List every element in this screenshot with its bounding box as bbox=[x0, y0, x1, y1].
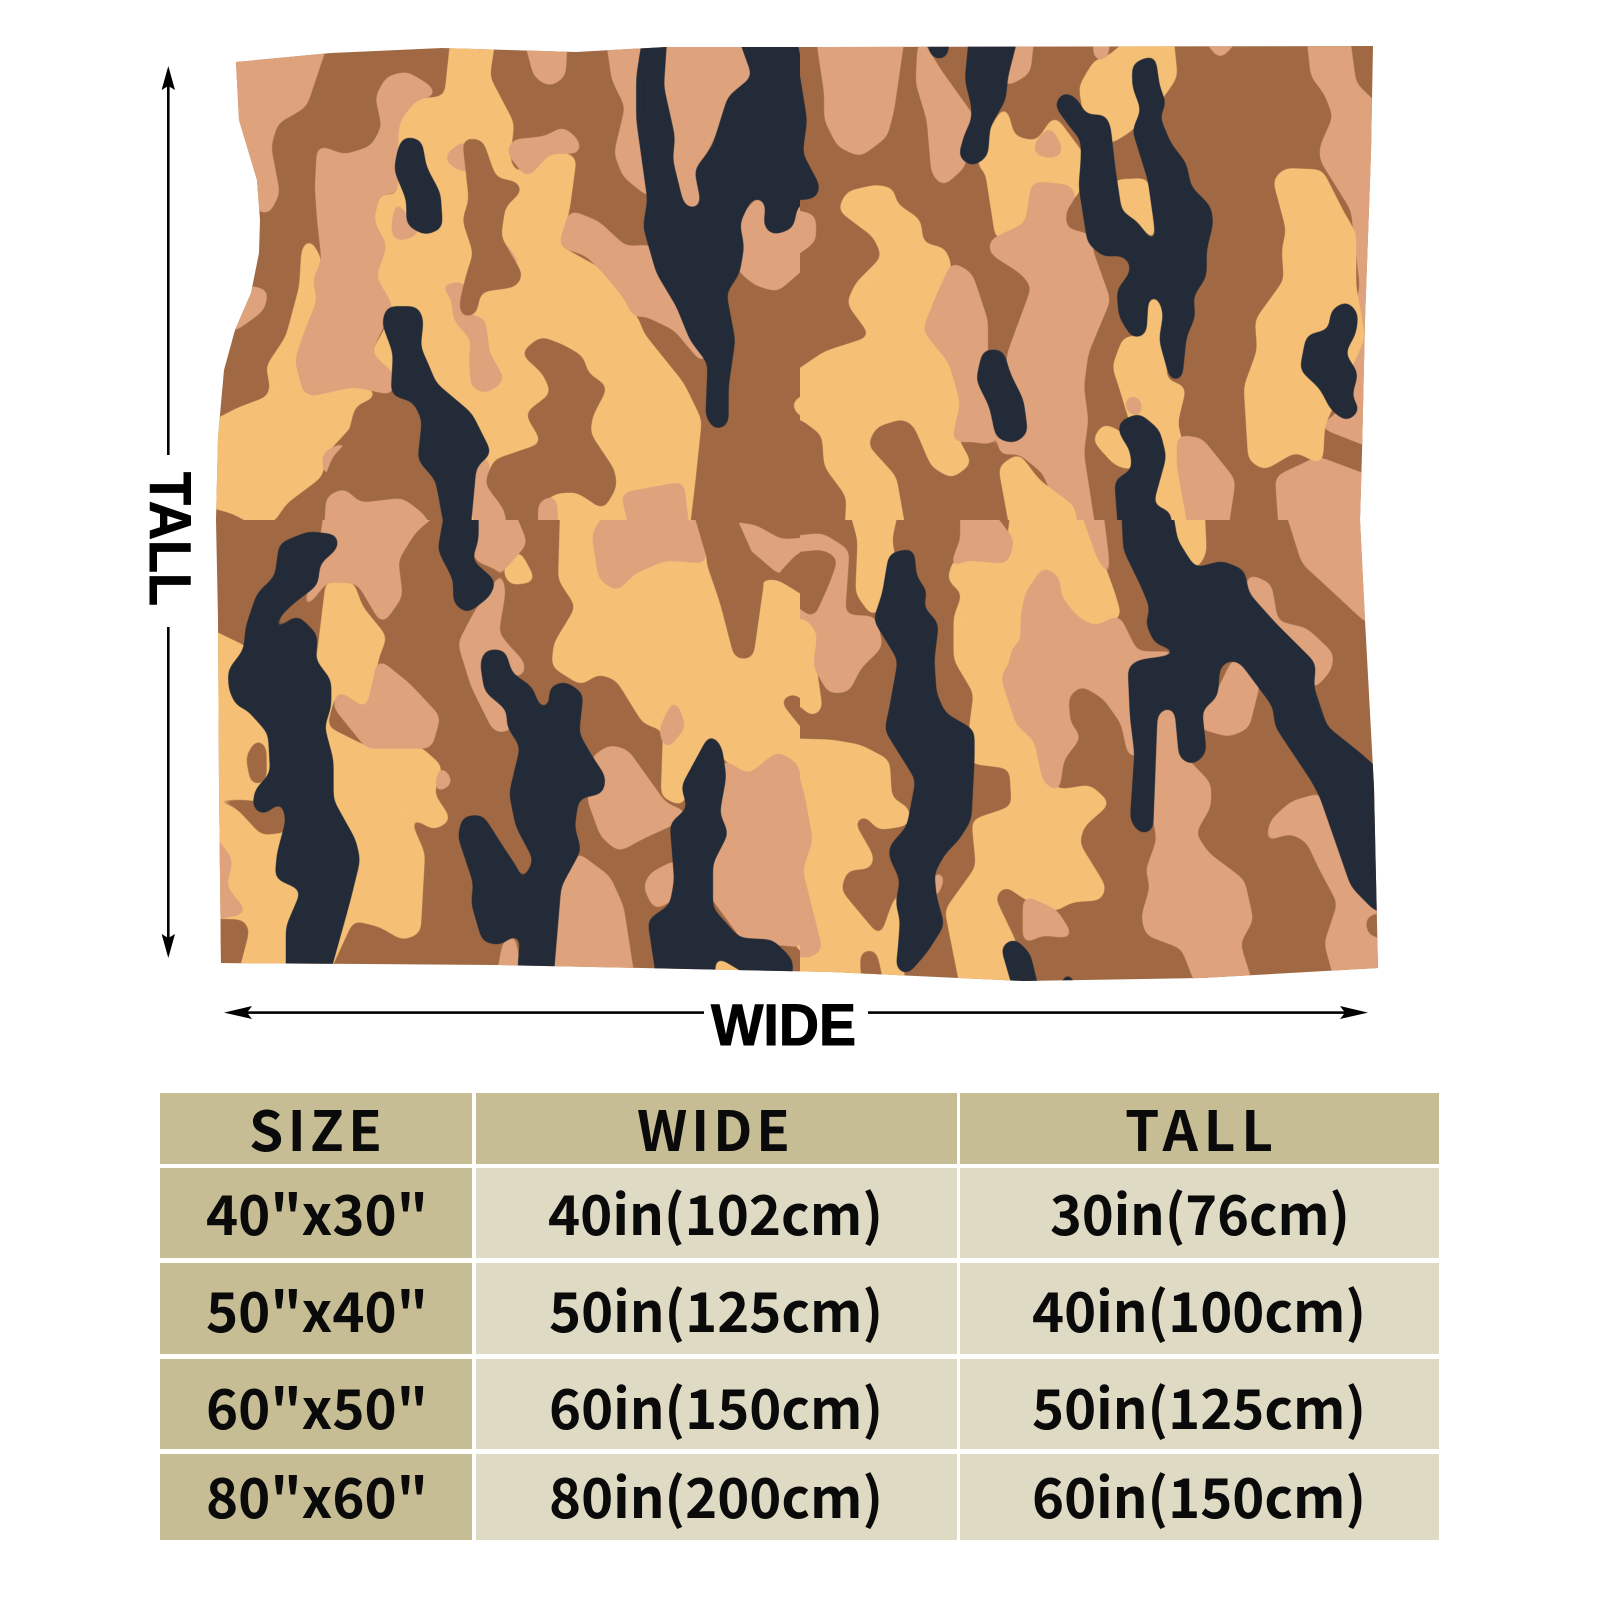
table row 40x30: 40"x30" bbox=[206, 1171, 428, 1251]
blanket with camouflage pattern bbox=[184, 30, 1400, 1000]
size table bbox=[160, 1087, 1439, 1540]
arrow: wide, leftward bbox=[224, 1006, 704, 1019]
table row 50x40 bbox=[160, 1263, 1439, 1354]
table row 60x50: 60"x50" bbox=[206, 1365, 428, 1445]
table row 60x50: 50in(125cm) bbox=[1032, 1365, 1366, 1445]
table row 60x50: 60in(150cm) bbox=[549, 1365, 883, 1445]
table row 40x30: 30in(76cm) bbox=[1050, 1171, 1350, 1251]
table row 80x60: 80in(200cm) bbox=[549, 1454, 883, 1534]
label: WIDE: WIDE bbox=[711, 993, 856, 1058]
camouflage: lower left bbox=[218, 520, 800, 972]
camouflage: lower right bbox=[800, 520, 1378, 981]
table row 80x60 bbox=[160, 1454, 1439, 1540]
label: TALL: TALL bbox=[137, 472, 202, 606]
camouflage: upper right bbox=[800, 46, 1372, 520]
table row 50x40: 50"x40" bbox=[206, 1268, 428, 1348]
table row 50x40: 40in(100cm) bbox=[1032, 1268, 1366, 1348]
table header row bbox=[160, 1087, 1439, 1167]
table row 40x30: 40in(102cm) bbox=[548, 1171, 883, 1251]
table row 50x40: 50in(125cm) bbox=[549, 1268, 883, 1348]
table header row: TALL bbox=[1125, 1087, 1273, 1167]
table header row: WIDE bbox=[637, 1087, 790, 1167]
table row 80x60: 60in(150cm) bbox=[1032, 1454, 1366, 1534]
table row 80x60: 80"x60" bbox=[206, 1454, 428, 1534]
camouflage: upper left bbox=[216, 47, 800, 520]
arrow: tall, downward bbox=[162, 627, 175, 958]
table row 40x30 bbox=[160, 1168, 1439, 1258]
arrow: wide, rightward bbox=[868, 1006, 1368, 1019]
arrow: tall, upward bbox=[162, 66, 175, 455]
table header row: SIZE bbox=[249, 1087, 382, 1167]
table row 60x50 bbox=[160, 1359, 1439, 1449]
